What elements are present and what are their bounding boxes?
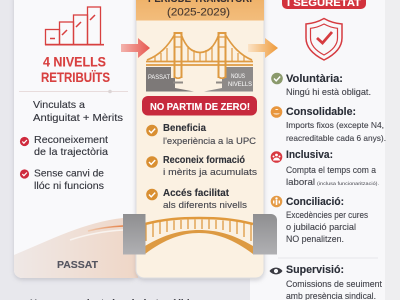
bullet: recognition of career: de la trajectòria	[34, 146, 108, 158]
bullet: recognition of career	[20, 134, 108, 158]
item: Supervisió	[270, 264, 382, 300]
text: linked to seniority and merits: Vinculats a	[33, 99, 85, 111]
bullet: recognition of career: Reconeixement	[34, 134, 108, 146]
item: Conciliació: o jubilació parcial	[286, 222, 356, 232]
text: linked to seniority and merits: Antiguitat + Mèrits	[33, 112, 123, 124]
item: Inclusiva: (inclusa funcionarització).	[317, 181, 379, 186]
bullet: easier access: als diferents nivells	[163, 200, 247, 211]
bullet: no change of place or duties	[20, 168, 104, 192]
icon: shield with check	[306, 18, 342, 60]
bullet: recognises training and merits: i mèrits ja acumulats	[163, 167, 257, 178]
banner: no partim de zero: NO PARTIM DE ZERO!	[150, 102, 250, 113]
header: period and years: (2025-2029)	[167, 6, 230, 18]
heading: 4 nivells retribuïts: RETRIBUÏTS	[41, 69, 110, 85]
panel: left, four paid levels	[14, 0, 138, 278]
bullet: easier access	[146, 188, 247, 211]
bullet: easier access: Accés facilitat	[163, 188, 230, 199]
right margin strip	[385, 0, 400, 300]
item: Consolidable: Consolidable:	[286, 106, 356, 118]
item: Inclusiva: laboral	[286, 177, 315, 187]
item: Conciliació: Conciliació:	[286, 196, 344, 208]
item: Consolidable: reacreditable cada 6 anys).	[286, 133, 386, 143]
bullet: benefits UPC experience: l'experiència a la UPC	[163, 136, 256, 147]
item: Conciliació: NO penalitzen.	[286, 234, 344, 244]
heading: 4 nivells retribuïts: 4 NIVELLS	[43, 54, 106, 70]
heading: 4 nivells retribuïts	[41, 54, 110, 85]
arrow: orange to safety	[248, 38, 278, 58]
item: Inclusiva: Inclusiva:	[286, 149, 333, 161]
item: Consolidable	[271, 106, 386, 143]
hill highlight stripes	[70, 226, 123, 240]
item: Inclusiva: Compta el temps com a	[286, 165, 376, 175]
item: Consolidable: Imports fixos (excepte N4,	[286, 120, 384, 130]
icon: rising steps chart	[45, 7, 104, 45]
item: Inclusiva	[271, 149, 379, 187]
panel: centre, transitional period	[136, 0, 264, 278]
illustration: suspension bridge between past and new levels: PASSAT	[148, 75, 170, 81]
bullet: recognises training and merits: Reconeix formació	[163, 155, 245, 166]
item: Conciliació	[271, 196, 368, 244]
item: Conciliació: Excedències per cures	[286, 210, 368, 220]
item: Voluntària: Ningú hi està obligat.	[286, 87, 371, 97]
banner: no partim de zero	[142, 96, 257, 116]
label: passat: PASSAT	[57, 260, 98, 271]
illustration: suspension bridge between past and new levels: NIVELLS	[228, 82, 252, 88]
bullet: benefits UPC experience: Beneficia	[163, 123, 206, 134]
illustration: arch bridge with stone abutments	[123, 214, 277, 254]
text: linked to seniority and merits	[33, 99, 123, 124]
bullet: no change of place or duties: Sense canvi de	[34, 168, 104, 180]
hill: past side of the bridge	[14, 218, 138, 278]
illustration: suspension bridge between past and new levels	[146, 33, 253, 92]
item: Supervisió: Supervisió:	[286, 264, 344, 276]
illustration: suspension bridge between past and new levels: NOUS	[231, 74, 245, 80]
bullet: benefits UPC experience	[146, 123, 256, 147]
item: Supervisió: Comissions de seuiment	[286, 279, 382, 289]
header: period and years	[136, 0, 264, 20]
item: Voluntària: Voluntària:	[286, 73, 343, 85]
bullet: no change of place or duties: llóc ni funcions	[34, 180, 104, 192]
bullet: recognises training and merits	[146, 155, 257, 178]
arrow: red to bridge	[121, 38, 150, 58]
panel: right, voluntary and secure	[250, 0, 386, 300]
item: Voluntària	[271, 73, 371, 97]
